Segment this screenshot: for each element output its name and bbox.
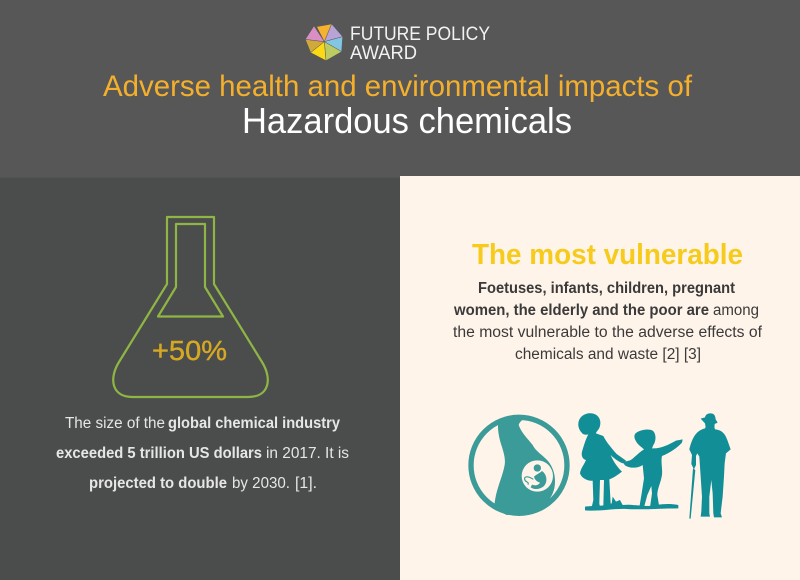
- title: Hazardous chemicals: [242, 100, 572, 141]
- text block: vulnerable groups: Foetuses, infants, children, pregnant: [478, 280, 735, 297]
- text block: industry size: in 2017. It is: [266, 445, 349, 462]
- text block: vulnerable groups: chemicals and waste [2] [3]: [515, 346, 701, 363]
- silhouette: boy: [623, 429, 683, 507]
- text block: industry size: projected to double: [89, 475, 227, 492]
- icon: flask: [113, 217, 268, 397]
- text block: industry size: by 2030.: [232, 475, 290, 492]
- silhouette: ground grass: [585, 497, 678, 511]
- text block: industry size: The size of the: [65, 415, 165, 432]
- title: Adverse health and environmental impacts of: [103, 70, 693, 103]
- text block: industry size: [1].: [295, 475, 317, 492]
- panel: chemical industry: [0, 178, 400, 580]
- text block: industry size: global chemical industry: [168, 415, 340, 432]
- silhouette: walking cane: [689, 468, 695, 519]
- text block: industry size: exceeded 5 trillion US dollars: [56, 445, 262, 462]
- text block: vulnerable groups: the most vulnerable to the adverse effects of: [453, 324, 763, 341]
- title: [103, 70, 693, 141]
- silhouette: elderly man: [689, 413, 731, 517]
- text block: vulnerable groups: [453, 280, 763, 363]
- stat: +50%: +50%: [152, 335, 227, 366]
- logo wordmark: AWARD: [350, 43, 417, 64]
- logo: Future Policy Award: [305, 24, 490, 64]
- heading: the most vulnerable: The most vulnerable: [472, 239, 743, 271]
- logo wordmark: FUTURE POLICY: [350, 24, 490, 45]
- icon: logo pinwheel: [305, 24, 343, 61]
- panel: header: [0, 0, 800, 178]
- icon: children and elderly man silhouettes: [578, 413, 731, 519]
- panel: the most vulnerable: [400, 176, 800, 580]
- icon: pregnant woman with foetus: [471, 417, 567, 515]
- text block: industry size: [56, 415, 349, 492]
- text block: vulnerable groups: women, the elderly and the poor are: [453, 302, 709, 319]
- text block: vulnerable groups: among: [713, 302, 759, 319]
- logo wordmark: [350, 24, 490, 64]
- silhouette: girl: [578, 413, 626, 507]
